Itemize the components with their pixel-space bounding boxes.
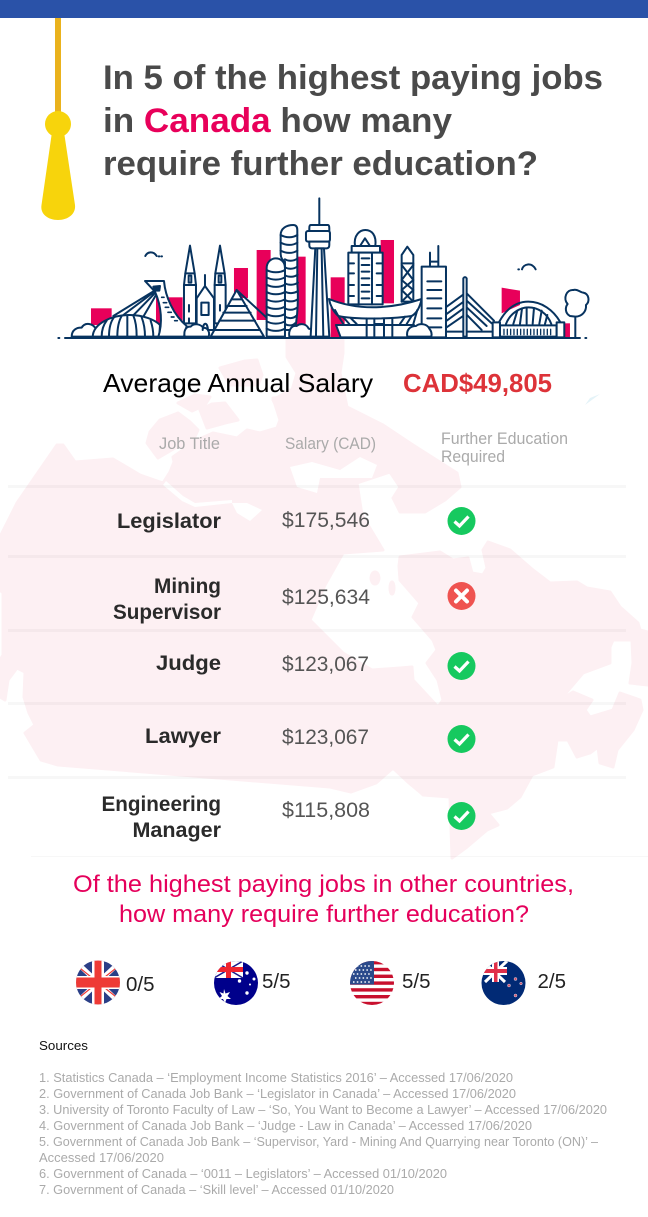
icon: green check [448,725,476,753]
sources list [39,1070,607,1197]
row: Engineering Manager: $115,808 [282,799,370,822]
sources list: 6. Government of Canada – ‘0011 – Legislators’ – Accessed 01/10/2020 [39,1166,447,1181]
background map of Canada [0,340,648,858]
row: Mining Supervisor [113,574,476,624]
other countries heading: how many require further education? [119,901,529,928]
sources list: 4. Government of Canada Job Bank – ‘Judge - Law in Canada’ – Accessed 17/06/2020 [39,1118,532,1133]
row: Legislator: $175,546 [282,509,370,532]
skyline left half [58,198,330,338]
icon: red cross [448,582,476,610]
sources list: 5. Government of Canada Job Bank – ‘Supervisor, Yard - Mining And Quarrying near Toronto (ON)’ – [39,1134,599,1149]
row: Legislator: Legislator [117,509,222,533]
other countries heading [73,871,574,928]
average annual salary: Average Annual Salary [103,368,373,398]
tassel [41,18,75,220]
row: Lawyer: Lawyer [145,724,222,748]
title: require further education? [103,145,538,183]
average annual salary [103,368,552,398]
row: Lawyer [145,724,476,753]
city skyline illustration [58,198,588,338]
label: Australia score: 5/5 [262,970,290,993]
map inlets [163,394,600,521]
row: Judge: $123,067 [282,653,369,676]
table column headers: Further Education [441,430,568,448]
label: UK score: 0/5 [126,973,154,996]
sources list: Accessed 17/06/2020 [39,1150,164,1165]
sources list: 2. Government of Canada Job Bank – ‘Legislator in Canada’ – Accessed 17/06/2020 [39,1086,516,1101]
table column headers: Job Title [159,435,220,453]
flag: United Kingdom [76,960,120,1005]
table row dividers [8,485,648,857]
icon: green check [448,802,476,830]
sources list: 1. Statistics Canada – ‘Employment Income Statistics 2016’ – Accessed 17/06/2020 [39,1070,513,1085]
row: Engineering Manager: Manager [132,818,222,842]
sources list: 3. University of Toronto Faculty of Law – ‘So, You Want to Become a Lawyer’ – Accessed 17/06/2020 [39,1102,607,1117]
icon: green check [448,507,476,535]
row: Judge [156,651,476,680]
title: In 5 of the highest paying jobs [103,59,603,97]
icon: green check [448,652,476,680]
table column headers: Required [441,448,505,466]
sources list: 7. Government of Canada – ‘Skill level’ – Accessed 01/10/2020 [39,1182,394,1197]
title: in Canada how many [103,102,452,140]
average annual salary: CAD$49,805 [403,368,552,398]
label: US score: 5/5 [402,970,430,993]
skyline right half [310,230,588,338]
other countries heading: Of the highest paying jobs in other countries, [73,871,574,898]
flag: Australia [214,961,258,1005]
row: Mining Supervisor: Supervisor [113,600,222,624]
row: Lawyer: $123,067 [282,726,369,749]
row: Mining Supervisor: $125,634 [282,586,370,609]
title [103,59,603,183]
table column headers [159,430,568,466]
row: Engineering Manager: Engineering [102,792,221,816]
row: Engineering Manager [102,792,476,842]
row: Mining Supervisor: Mining [154,574,221,598]
flag: New Zealand [481,961,526,1005]
sources heading: Sources [39,1038,89,1053]
table column headers: Salary (CAD) [285,435,376,453]
flag: United States [350,961,394,1005]
row: Legislator [117,507,476,535]
top bar [0,0,648,18]
label: New Zealand score: 2/5 [538,970,566,993]
row: Judge: Judge [156,651,221,675]
